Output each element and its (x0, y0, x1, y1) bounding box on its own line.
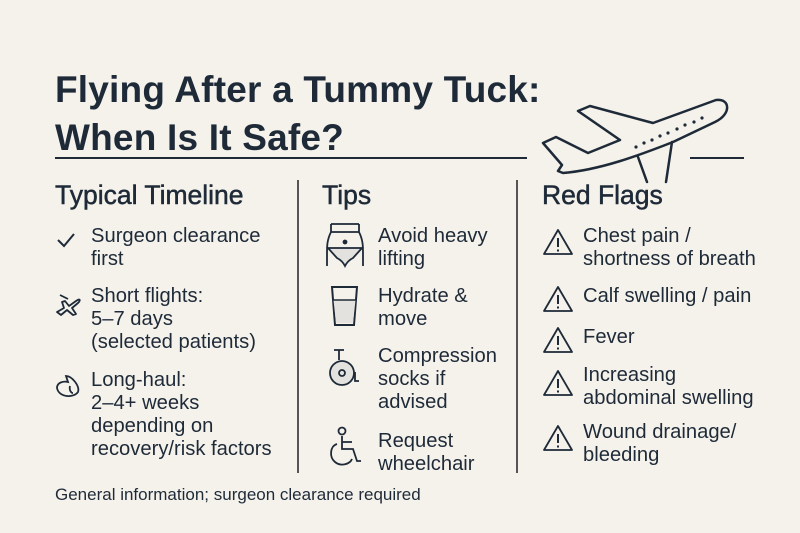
text: short flights (91, 285, 256, 353)
panel: tips (322, 180, 497, 475)
text: hydrate: Hydrate & (378, 285, 468, 307)
text: long-haul: depending on (91, 415, 213, 437)
icon: warning 1 (543, 229, 573, 255)
text: chest pain: shortness of breath (583, 248, 756, 270)
title: Flying After a Tummy Tuck: (55, 69, 541, 110)
title: When Is It Safe? (55, 117, 344, 158)
text: hydrate (378, 285, 468, 330)
text: wheelchair: wheelchair (378, 453, 475, 475)
title (55, 69, 541, 158)
icon: wheelchair (330, 426, 361, 466)
panel: typical timeline (55, 180, 272, 460)
icon: small plane (56, 294, 81, 316)
text: calf swelling: Calf swelling / pain (583, 285, 751, 307)
text: wheelchair (378, 430, 475, 475)
text: wound drainage: bleeding (583, 444, 659, 466)
text: hydrate: move (378, 308, 427, 330)
text: compression socks: Compression (378, 345, 497, 367)
icon: long-haul (56, 375, 80, 397)
text: chest pain (583, 225, 756, 270)
icon: abdomen (326, 223, 364, 268)
heading: tips: Tips (322, 180, 371, 210)
text: compression socks (378, 345, 497, 413)
panel: red flags (542, 180, 756, 466)
text: long-haul: 2–4+ weeks (91, 392, 199, 414)
icon: warning 5 (543, 425, 573, 451)
text: avoid lifting (378, 225, 488, 270)
text: long-haul (91, 369, 272, 460)
text: compression socks: socks if (378, 368, 445, 390)
text: compression socks: advised (378, 391, 448, 413)
icon: glass of water (330, 286, 358, 326)
text: abdominal swelling: Increasing (583, 364, 676, 386)
heading: timeline: Typical Timeline (55, 180, 244, 210)
text: long-haul: Long-haul: (91, 369, 186, 391)
text: short flights: 5–7 days (91, 308, 173, 330)
text: short flights: Short flights: (91, 285, 203, 307)
text: wound drainage (583, 421, 736, 466)
text: surgeon clearance (91, 225, 260, 270)
icon: warning 4 (543, 370, 573, 396)
text: surgeon clearance: first (91, 248, 124, 270)
text: wound drainage: Wound drainage/ (583, 421, 736, 443)
text: wheelchair: Request (378, 430, 453, 452)
text: surgeon clearance: Surgeon clearance (91, 225, 260, 247)
text: chest pain: Chest pain / (583, 225, 691, 247)
heading: red flags: Red Flags (542, 180, 663, 210)
text: fever: Fever (583, 326, 635, 348)
icon: compression device (329, 349, 359, 386)
text: abdominal swelling: abdominal swelling (583, 387, 754, 409)
text: avoid lifting: lifting (378, 248, 425, 270)
icon: warning 2 (543, 286, 573, 312)
text: avoid lifting: Avoid heavy (378, 225, 488, 247)
footer note: General information; surgeon clearance required (55, 485, 421, 504)
icon: check (57, 233, 75, 248)
text: short flights: (selected patients) (91, 331, 256, 353)
icon: warning 3 (543, 327, 573, 353)
text: abdominal swelling (583, 364, 754, 409)
text: long-haul: recovery/risk factors (91, 438, 272, 460)
